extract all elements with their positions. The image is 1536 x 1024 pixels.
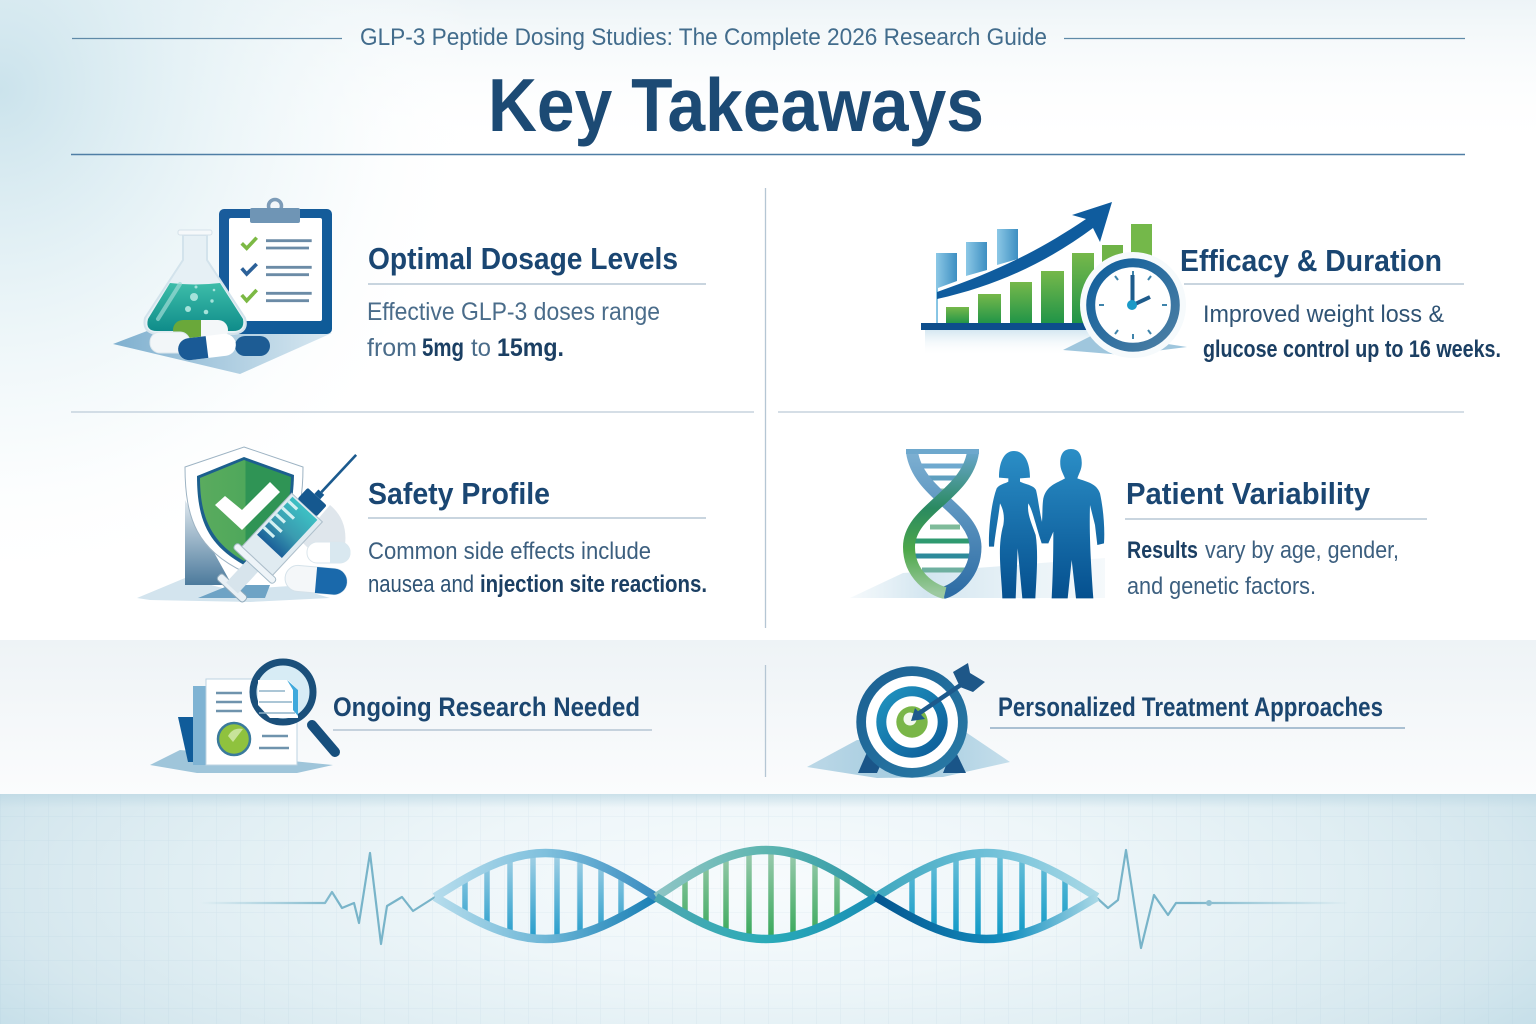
body text: Improved weight loss & (1203, 301, 1444, 328)
heading: Optimal Dosage Levels (368, 241, 678, 276)
heading: Patient Variability (1126, 476, 1371, 511)
chart: ECG pulse lines (200, 850, 1347, 948)
chart: DNA double helix (435, 850, 1097, 939)
body text (1127, 537, 1399, 600)
body text: 15mg. (497, 334, 564, 362)
body text: Common side effects include (368, 538, 651, 565)
panel: personalized treatment approaches (807, 663, 1405, 778)
body text (1203, 301, 1501, 363)
heading: Safety Profile (368, 476, 550, 511)
heading: Personalized Treatment Approaches (998, 692, 1383, 722)
body text: Results (1127, 537, 1198, 564)
icon: DNA helix and two people (850, 449, 1105, 598)
title: Key Takeaways (488, 63, 984, 147)
subtitle: GLP-3 Peptide Dosing Studies: The Complete 2026 Research Guide (360, 24, 1047, 51)
icon: shield, syringe and pills (137, 436, 376, 609)
panel: highlighted lower row (0, 640, 1536, 794)
panel: footer band with DNA and ECG (0, 794, 1536, 1024)
header (71, 24, 1465, 154)
icon: growth chart and clock (921, 202, 1187, 358)
body text: injection site reactions. (480, 571, 707, 598)
body text: to (471, 334, 491, 362)
body text: Effective GLP-3 doses range (367, 298, 660, 326)
panel: ongoing research needed (150, 662, 652, 773)
panel: optimal dosage levels (113, 200, 706, 374)
body text (367, 298, 660, 362)
heading: Efficacy & Duration (1180, 243, 1442, 278)
body text: and genetic factors. (1127, 573, 1316, 600)
body text (368, 538, 707, 598)
heading: Ongoing Research Needed (333, 692, 640, 722)
body text: vary by age, gender, (1205, 537, 1399, 564)
body text: 5mg (422, 334, 464, 362)
body text: from (367, 334, 417, 362)
body text: nausea and (368, 571, 474, 598)
icon: target and arrow (807, 663, 1010, 778)
icon: report and magnifier (150, 662, 335, 773)
icon: flask, clipboard and pills (113, 200, 332, 374)
panel: patient variability (850, 449, 1427, 600)
panel: efficacy and duration (921, 202, 1501, 363)
panel: safety profile (137, 436, 707, 609)
